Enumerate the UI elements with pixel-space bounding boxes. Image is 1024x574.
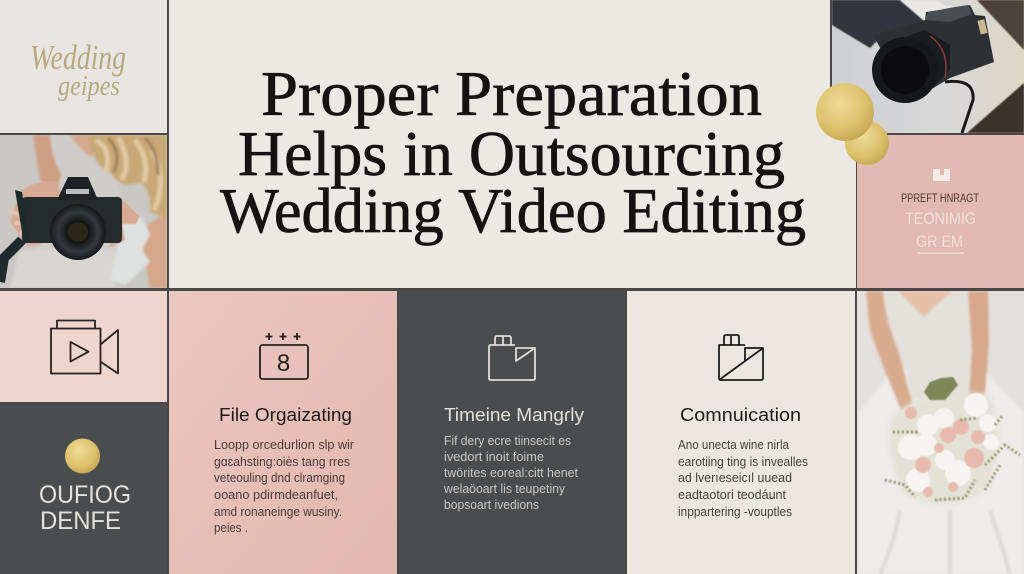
panel: timeline managing [399, 291, 625, 574]
body text: twörites eoreal:citt henet [444, 466, 579, 480]
tile text [39, 481, 131, 535]
photo: bride holding camera [0, 135, 167, 288]
promo text: TEONIMIG [905, 209, 976, 228]
photo: camera on table [832, 0, 1024, 133]
body text: earotiing ting is invealles [678, 455, 808, 469]
body text: veteouling dnd clramging [214, 471, 345, 485]
panel: main title [169, 0, 856, 288]
body text: ad lverıeseicıl uuead [678, 471, 792, 485]
panel: gold dot tile [0, 404, 167, 574]
script text: geipes [58, 70, 120, 102]
panel: communication [627, 291, 855, 574]
camera [872, 5, 994, 133]
script text [30, 38, 126, 102]
heading: Timeine Mangɾly [444, 404, 585, 425]
icon: folder dark [719, 335, 763, 380]
script text: Wedding [30, 38, 126, 77]
bouquet [885, 377, 1020, 504]
icon: video camera [51, 320, 118, 374]
body text [443, 434, 579, 512]
heading: Comnuication [680, 404, 801, 425]
tile text: OUFIOG [39, 481, 131, 509]
body text: Loopp orcedurlion slp wir [214, 438, 354, 452]
icon: gold dot [65, 438, 100, 474]
title: Wedding Video Editing [220, 175, 806, 246]
icon: small white mark [933, 169, 950, 181]
body text: ivedort inoit foime [444, 450, 544, 464]
tile text: DENFE [40, 507, 121, 535]
body text [214, 438, 354, 535]
promo text: GR EM [916, 232, 963, 251]
body text: bopsoart ivedions [444, 498, 539, 512]
icon: folder light [489, 336, 535, 380]
photo: bride with bouquet [857, 291, 1024, 574]
heading: File Orgaizating [219, 404, 352, 425]
body text: Fif dery ecre tiinsecit es [444, 434, 571, 448]
foliage sprigs [885, 415, 1020, 500]
title [220, 58, 806, 246]
title: Helps in Outsourcing [238, 118, 785, 189]
body text: inppartering -vouptles [678, 505, 792, 519]
body text: Ano unecta wine nirla [678, 438, 789, 452]
title: Proper Preparation [261, 58, 762, 129]
panel: pink promo [857, 135, 1024, 288]
hands [10, 181, 140, 247]
body text: ooano pdirmdeanfuet, [214, 488, 338, 502]
body text: gɑɛahsting:oiės tang rres [214, 455, 350, 469]
body text: welaöoart lis teupetiny [443, 482, 566, 496]
promo text [901, 191, 980, 251]
panel: file organizing [169, 291, 397, 574]
icon: gold balls [816, 83, 889, 165]
icon: calendar digit: 8 [277, 350, 290, 377]
body text: eadtaotori teodáunt [678, 488, 787, 502]
body text: peies . [214, 521, 248, 535]
panel: script label [0, 0, 167, 133]
body text: amd ronaneinge wusiny. [214, 505, 342, 519]
camera body [0, 177, 122, 282]
promo text: PPREFT HNRAGT [901, 191, 980, 205]
panel: video icon tile [0, 291, 167, 402]
body text [678, 438, 808, 519]
icon: calendar [260, 333, 308, 379]
